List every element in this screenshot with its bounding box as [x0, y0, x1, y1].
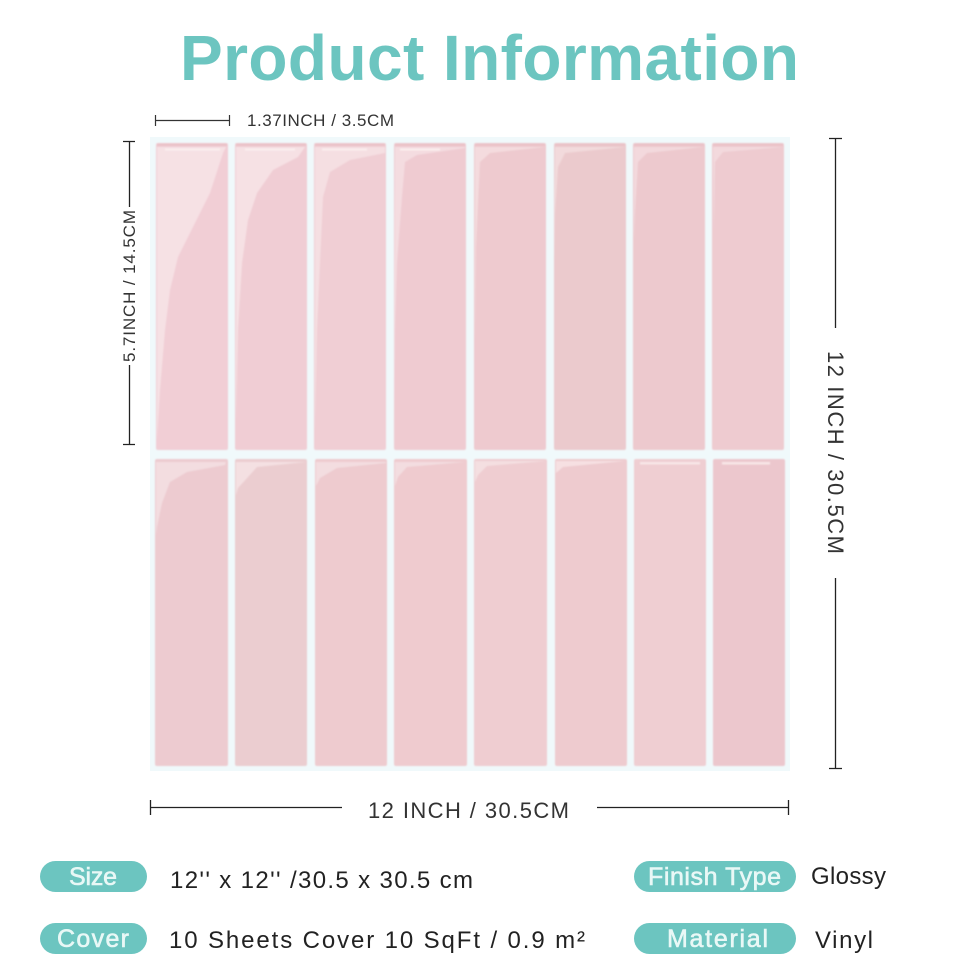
badge: size: Size	[69, 863, 117, 891]
top edge shine, top row	[157, 144, 783, 146]
spec: size	[40, 861, 473, 894]
badge: size	[40, 861, 147, 892]
dimension: sheet height	[823, 138, 848, 769]
dimension: sheet height: 12 INCH / 30.5CM	[823, 351, 848, 554]
dimension: tile width	[155, 111, 394, 130]
badge: finish type: Finish Type	[648, 863, 781, 891]
badge: material	[634, 923, 796, 954]
top row of tiles	[156, 143, 784, 450]
dimension: sheet width: 12 INCH / 30.5CM	[368, 798, 569, 823]
glossy highlights bottom row	[156, 462, 226, 535]
dimension: sheet width	[150, 798, 789, 823]
dimension: tile height: 5.7INCH / 14.5CM	[120, 210, 139, 362]
value: cover: 10 Sheets Cover 10 SqFt / 0.9 m²	[169, 927, 585, 954]
title: Product Information	[180, 22, 799, 94]
value: size: 12'' x 12'' /30.5 x 30.5 cm	[170, 867, 473, 894]
bottom row of tiles	[155, 459, 785, 766]
spec: material	[634, 923, 873, 954]
dimension: tile width: 1.37INCH / 3.5CM	[247, 111, 394, 130]
glossy highlights top row	[157, 147, 226, 440]
badge: cover	[40, 923, 147, 954]
badge: cover: Cover	[57, 925, 129, 953]
value: material: Vinyl	[815, 927, 873, 954]
dimension: tile height	[120, 141, 139, 445]
panel: tile sheet	[150, 137, 790, 771]
spec: finish type	[634, 861, 886, 892]
spec: cover	[40, 923, 585, 954]
badge: material: Material	[667, 925, 768, 953]
value: finish type: Glossy	[811, 863, 886, 890]
